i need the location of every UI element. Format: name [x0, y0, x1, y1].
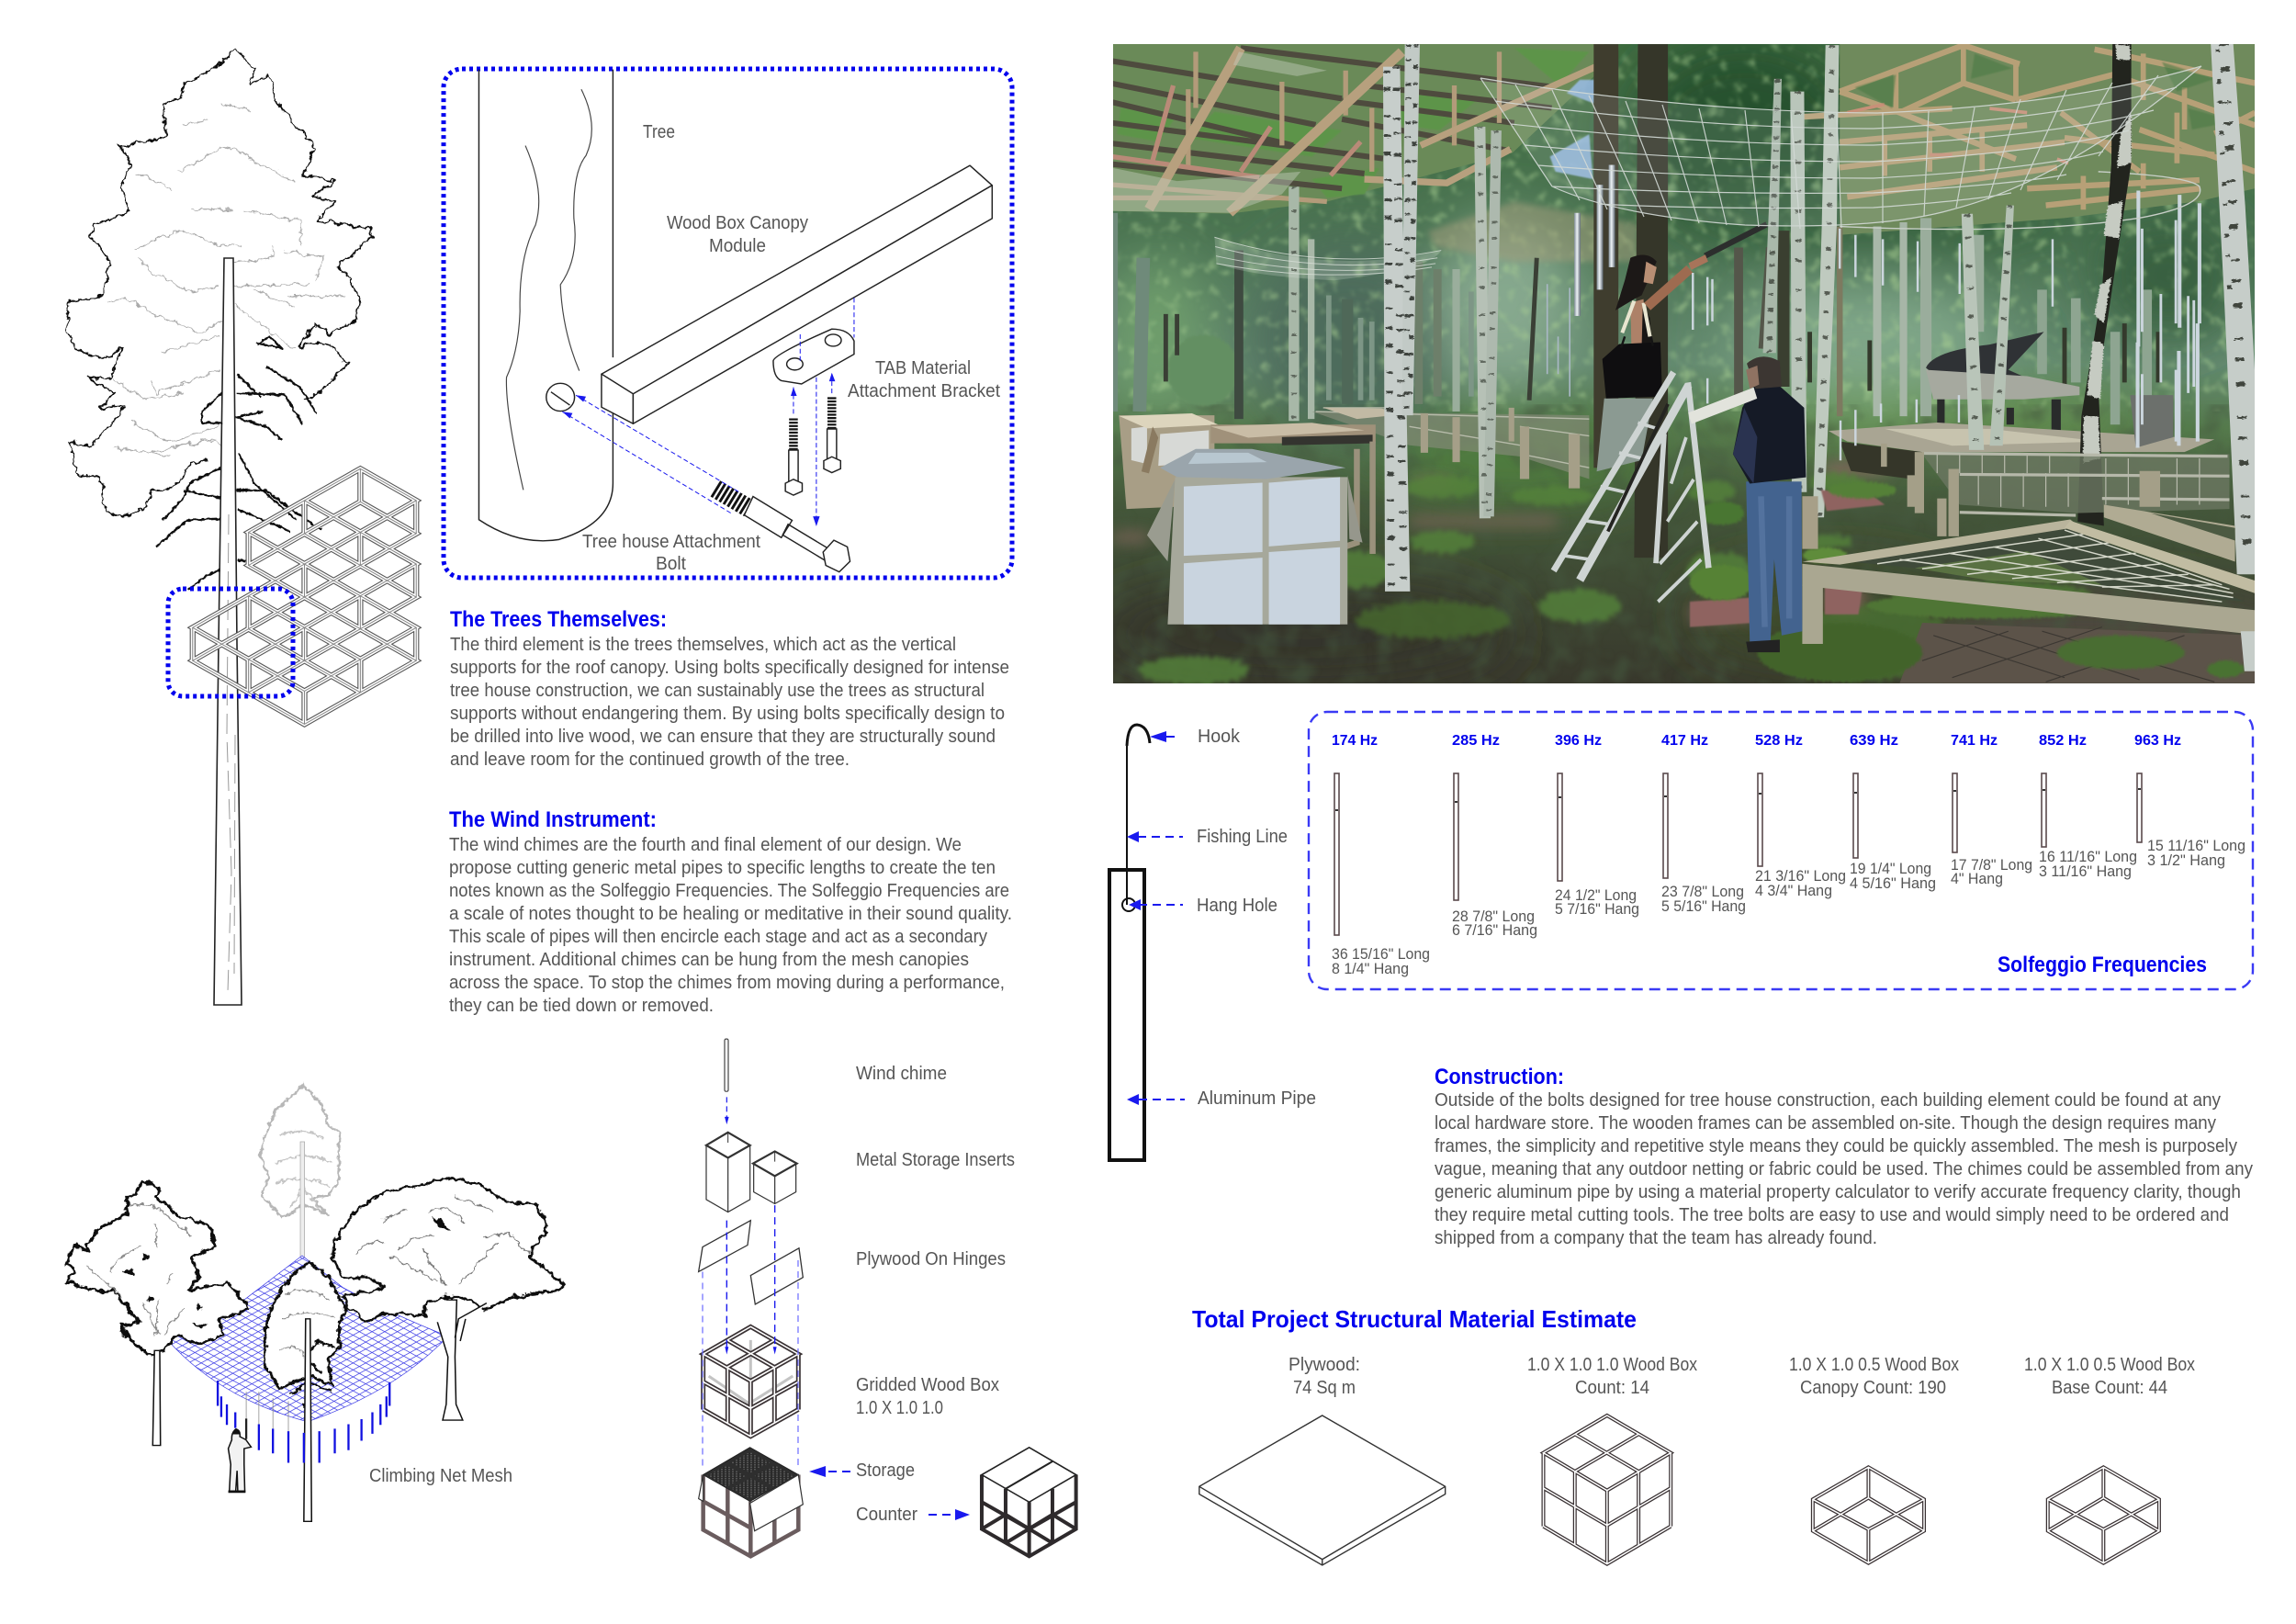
pipe dimensions: 36 15/16" Long — [1332, 945, 1430, 963]
half box canopy: 1.0 X 1.0 0.5 Wood Box — [1789, 1355, 1959, 1375]
pipe dimensions: 19 1/4" Long — [1850, 860, 1931, 877]
dark tree trunks — [1606, 44, 1668, 558]
pipes — [1334, 773, 2142, 935]
right tree — [332, 1179, 564, 1322]
text block: construction: Construction: — [1435, 1065, 1564, 1089]
fences — [1311, 408, 1589, 489]
text block: the trees themselves: supports for the roof canopy. Using bolts specifically designed for intense — [450, 658, 1009, 678]
canopy lattice — [193, 468, 416, 724]
silver chimes — [1548, 165, 1615, 397]
background pine trunk — [300, 1142, 305, 1258]
centre tree trunk — [304, 1319, 311, 1521]
panel: bolt attachment detail: Tree house Attachment — [582, 532, 760, 552]
labels: Wind chime — [856, 1064, 947, 1084]
pipe dimensions: 21 3/16" Long — [1755, 867, 1846, 885]
dark lower branches — [156, 337, 321, 590]
plywood sheet: Plywood: — [1289, 1355, 1360, 1375]
wire and hook — [1126, 746, 1128, 905]
frequency labels: 285 Hz — [1452, 733, 1500, 749]
pipe dimensions: 23 7/8" Long — [1661, 883, 1744, 900]
hang hole — [1122, 898, 1135, 911]
panel title: Solfeggio Frequencies — [1998, 953, 2207, 977]
fences — [1881, 444, 2230, 536]
half box canopy — [1789, 1355, 1959, 1563]
text block: the wind instrument: The wind chimes are the fourth and final element of our design. We — [449, 835, 962, 855]
frequency labels: 528 Hz — [1755, 733, 1803, 749]
bark marks pair — [1387, 44, 1416, 588]
ladder front rails — [1554, 372, 1689, 581]
illustration: exploded storage box — [699, 1039, 1076, 1556]
plywood hinges — [699, 1221, 803, 1304]
text block: the wind instrument: propose cutting generic metal pipes to specific lengths to create the ten — [449, 858, 996, 878]
panel: bolt attachment detail — [444, 69, 1012, 578]
frequency labels: 963 Hz — [2134, 733, 2181, 749]
panel: bolt attachment detail: TAB Material — [875, 358, 971, 378]
text block: the wind instrument: This scale of pipes will then encircle each stage and act as a secondary — [449, 927, 987, 947]
left half scene — [1112, 43, 1690, 625]
metal storage inserts — [706, 1133, 797, 1212]
text block: the trees themselves: The third element is the trees themselves, which act as the vertical — [450, 635, 956, 655]
light foliage specks — [1113, 44, 2255, 412]
label: climbing net: Climbing Net Mesh — [369, 1466, 512, 1486]
diagram: chime hook anatomy: Aluminum Pipe — [1198, 1088, 1316, 1109]
right birch marks — [2217, 43, 2248, 572]
text block: the wind instrument: notes known as the Solfeggio Frequencies. The Solfeggio Frequencies are — [449, 881, 1009, 901]
ground paving — [1899, 623, 2255, 683]
main net mesh — [1480, 66, 2201, 229]
stage — [1829, 423, 2214, 452]
text block: construction — [1435, 1065, 2253, 1248]
frequency labels: 741 Hz — [1951, 733, 1998, 749]
pipe dimensions: 3 1/2" Hang — [2147, 851, 2225, 869]
small mesh — [1214, 237, 1441, 280]
panel: solfeggio frequencies — [1309, 712, 2253, 989]
text block: the trees themselves: supports without endangering them. By using bolts specifically design to — [450, 704, 1005, 724]
text block: the wind instrument — [449, 807, 1012, 1016]
bark marks centre — [1294, 127, 1496, 518]
pine crown outline — [67, 49, 372, 516]
woman — [1597, 254, 1690, 471]
full wood box: 1.0 X 1.0 1.0 Wood Box — [1527, 1355, 1697, 1375]
text block: the wind instrument: The Wind Instrument: — [449, 807, 657, 832]
pipe dimensions: 6 7/16" Hang — [1452, 921, 1537, 939]
frequency labels: 174 Hz — [1332, 733, 1378, 749]
pipe dimensions: 17 7/8" Long — [1951, 856, 2032, 874]
right big birch — [2211, 43, 2255, 574]
illustration: exploded storage box: Plywood On Hinges — [856, 1249, 1006, 1269]
pipe dimensions: 4 3/4" Hang — [1755, 882, 1832, 899]
wood beam — [602, 165, 992, 423]
chime ring wire — [1840, 172, 2200, 230]
pipe dimensions: 4 5/16" Hang — [1850, 874, 1936, 892]
panel: bolt attachment detail: Bolt — [656, 554, 686, 574]
net mesh — [169, 1256, 448, 1422]
pipe dimensions: 28 7/8" Long — [1452, 908, 1535, 925]
background grey pine — [260, 1085, 341, 1218]
text block: construction: they require metal cutting tools. The tree bolts are easy to use and would simply need to be ordered and — [1435, 1205, 2229, 1225]
man — [1733, 356, 1806, 652]
grass clumps — [1139, 473, 2195, 685]
trunk — [214, 258, 242, 1005]
chimes group — [1693, 191, 2200, 460]
dashed border — [1309, 712, 2253, 989]
foreground bench with net — [1802, 504, 2255, 671]
hazy trunks — [1115, 186, 1536, 421]
grass foreground — [1690, 481, 2245, 682]
frequency labels — [1332, 733, 2181, 749]
timber canopy right — [1802, 43, 2255, 235]
arrows — [1127, 731, 1185, 1105]
wind chime pipe — [725, 1039, 729, 1124]
panel border — [444, 69, 1012, 578]
back boxes and tables — [1119, 413, 1376, 554]
text block: construction: local hardware store. The wooden frames can be assembled on-site. Though the design requires many — [1435, 1113, 2216, 1133]
pipe dimensions: 24 1/2" Long — [1555, 886, 1637, 904]
full wood box: Count: 14 — [1575, 1378, 1649, 1398]
right tree trunk — [437, 1300, 487, 1420]
pipe dimensions: 16 11/16" Long — [2039, 848, 2137, 865]
left tree trunk — [152, 1350, 161, 1446]
text block: the trees themselves: and leave room for the continued growth of the tree. — [450, 750, 850, 770]
ladder dark stripe — [1608, 404, 1668, 532]
text block: construction: frames, the simplicity and repetitive style means they could be quickly assembled. The mesh is purposely — [1435, 1136, 2237, 1156]
text block: construction: generic aluminum pipe by using a material property calculator to verify accurate frequency clarity, though — [1435, 1182, 2241, 1202]
half box base: 1.0 X 1.0 0.5 Wood Box — [2024, 1355, 2195, 1375]
text block: the trees themselves: The Trees Themselves: — [450, 607, 667, 632]
panel: bolt attachment detail: Attachment Bracket — [848, 381, 1000, 401]
labels: Tree — [643, 122, 675, 142]
text block: construction: vague, meaning that any outdoor netting or fabric could be used. The chimes could be assembled from any — [1435, 1159, 2253, 1179]
speaker — [2130, 395, 2173, 448]
text block: the trees themselves: tree house construction, we can sustainably use the trees as structural — [450, 681, 985, 701]
illustration: exploded storage box: Metal Storage Inserts — [856, 1150, 1015, 1170]
pipe dimensions: 8 1/4" Hang — [1332, 960, 1409, 977]
bark detail — [227, 514, 235, 992]
pipe dimensions: 15 11/16" Long — [2147, 837, 2245, 854]
text block: the trees themselves: be drilled into live wood, we can ensure that they are structurally sound — [450, 727, 996, 747]
diagram: chime hook anatomy — [1109, 725, 1316, 1160]
frequency labels: 417 Hz — [1661, 733, 1708, 749]
diagram: chime hook anatomy: Hang Hole — [1197, 896, 1277, 916]
panel: bolt attachment detail: Module — [709, 236, 766, 256]
half box canopy: Canopy Count: 190 — [1800, 1378, 1946, 1398]
text block: the wind instrument: instrument. Additional chimes can be hung from the mesh canopies — [449, 950, 969, 970]
sky — [1550, 80, 1596, 179]
gridded wood box — [703, 1326, 798, 1437]
timber canopy left — [1112, 43, 1604, 214]
storage configuration — [699, 1448, 803, 1556]
illustration: exploded storage box: Gridded Wood Box — [856, 1375, 999, 1395]
woman's pipe and hand — [1705, 224, 1767, 256]
panel: bolt attachment detail: Wood Box Canopy — [667, 213, 808, 233]
ladder rear rail and rungs — [1658, 382, 1708, 602]
pipe hang points — [1335, 789, 2141, 810]
birch white patches — [2083, 45, 2132, 463]
man's white pipe — [1690, 393, 1755, 418]
frequency labels: 852 Hz — [2039, 733, 2087, 749]
text block: construction: shipped from a company that the team has already found. — [1435, 1228, 1877, 1248]
hanging chimes — [218, 1381, 389, 1463]
frequency labels: 396 Hz — [1555, 733, 1602, 749]
white storage box — [1147, 449, 1363, 625]
birch trunks — [1790, 92, 1806, 492]
birch trunks pair — [1383, 67, 1410, 592]
tree section — [478, 70, 613, 541]
piano — [1926, 332, 2079, 433]
pipe dimensions — [1332, 837, 2245, 977]
text block: construction: Outside of the bolts designed for tree house construction, each building element could be found at any — [1435, 1090, 2221, 1111]
half box base — [2024, 1355, 2195, 1563]
counter configuration — [982, 1448, 1076, 1556]
material estimate section — [1192, 1305, 2195, 1565]
assembly dashed guides — [703, 1205, 798, 1469]
text block: the trees themselves — [450, 607, 1009, 770]
pipe dimensions: 4" Hang — [1951, 870, 2003, 887]
paving grid — [1922, 627, 2214, 682]
half box base: Base Count: 44 — [2052, 1378, 2167, 1398]
plywood sheet — [1199, 1355, 1446, 1565]
text block: the wind instrument: a scale of notes thought to be healing or meditative in their sound quality. — [449, 904, 1012, 924]
base sky and ground — [1113, 44, 2255, 683]
arrows — [809, 1466, 970, 1520]
pipe dimensions: 5 7/16" Hang — [1555, 900, 1639, 918]
aluminium pipe — [1109, 870, 1144, 1160]
section title: Total Project Structural Material Estimate — [1192, 1305, 1637, 1333]
ground pink patches — [1113, 459, 1892, 620]
plywood sheet: 74 Sq m — [1293, 1378, 1356, 1398]
diagram: chime hook anatomy: Fishing Line — [1197, 827, 1288, 847]
ground reds — [1690, 490, 1885, 627]
bush — [1167, 334, 1239, 406]
illustration: exploded storage box: 1.0 X 1.0 1.0 — [856, 1398, 943, 1418]
illustration: exploded storage box: Storage — [856, 1460, 915, 1481]
full wood box — [1527, 1355, 1697, 1564]
text block: the wind instrument: across the space. To stop the chimes from moving during a performance, — [449, 973, 1005, 993]
pipe dimensions: 5 5/16" Hang — [1661, 897, 1746, 915]
ground dapple shadow — [1113, 404, 2255, 683]
main black birch — [2077, 43, 2132, 525]
text block: the wind instrument: they can be tied down or removed. — [449, 996, 714, 1016]
illustration: exploded storage box: Counter — [856, 1505, 917, 1525]
pipe dimensions: 3 11/16" Hang — [2039, 863, 2132, 880]
bracket and bolts — [562, 298, 854, 572]
left tree — [67, 1179, 248, 1355]
bark marks — [1769, 45, 2010, 517]
front birch trunks — [1480, 127, 1496, 518]
rendering: forest stage photo — [1093, 37, 2296, 689]
frequency labels: 639 Hz — [1850, 733, 1898, 749]
distant lattice — [1428, 202, 1638, 262]
human figure — [229, 1429, 251, 1493]
illustration: trees with climbing net mesh — [67, 1085, 564, 1521]
right half scene — [1658, 43, 2255, 683]
labels: Hook — [1198, 727, 1241, 747]
foliage and haze masses — [1093, 37, 2296, 689]
post by man — [1802, 496, 1818, 549]
far hazy trunks — [1739, 218, 2158, 424]
centre tree — [265, 1262, 346, 1407]
highlight box — [168, 589, 293, 696]
illustration: pine tree with canopy lattice — [67, 49, 416, 1005]
